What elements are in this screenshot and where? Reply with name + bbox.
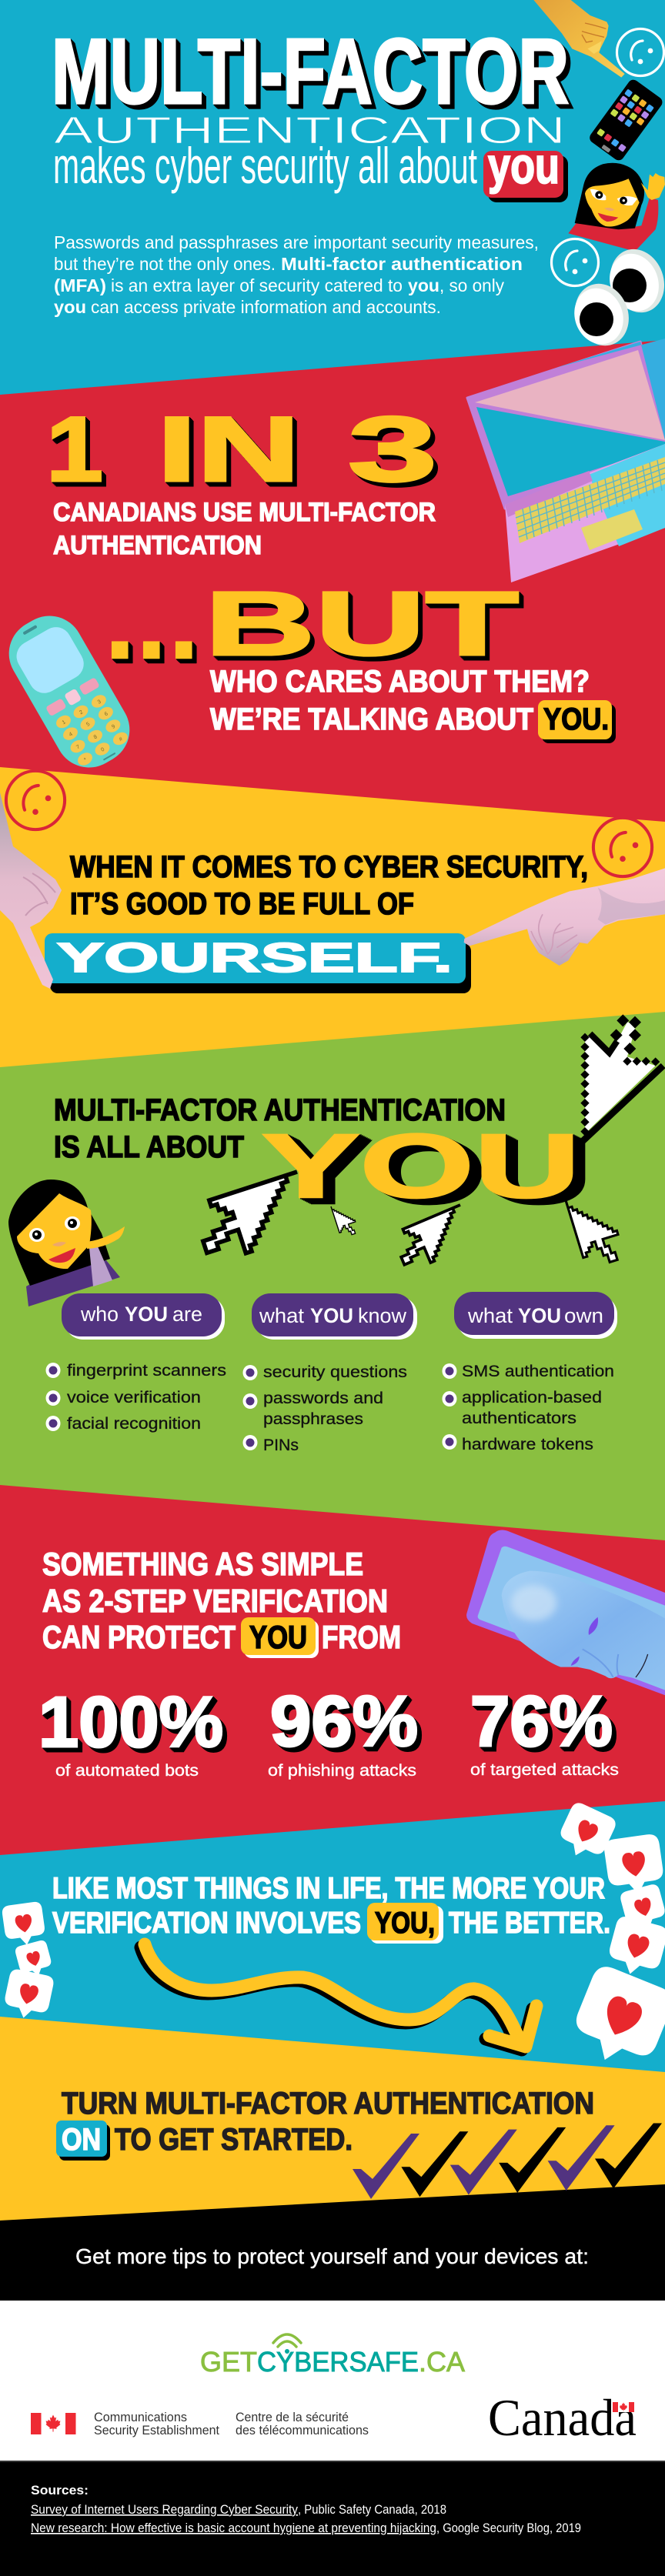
icon: waving woman: [568, 163, 665, 252]
icon: smile top right: [617, 29, 663, 75]
pill: who you are: YOU: [125, 1303, 168, 1326]
heart bubble right 1: [603, 1833, 665, 1898]
list: what you own: SMS authentication: [462, 1363, 614, 1380]
pill: who you are: [62, 1293, 225, 1340]
logo: canada wordmark: Canada: [488, 2388, 637, 2447]
list: what you know: passwords and: [263, 1390, 383, 1407]
text: who cares about them: WE’RE TALKING ABOUT: [210, 702, 533, 736]
text: who cares about them: YOU.: [543, 702, 609, 736]
icon: hand pointing down: [0, 792, 62, 989]
statistic: 76 percent: 76%: [470, 1681, 613, 1761]
pill: who you are: are: [172, 1303, 202, 1326]
icon: candy phone: 7: [75, 744, 81, 750]
pill: what you own: YOU: [518, 1304, 561, 1327]
icon: tablet: [587, 78, 664, 162]
statistic: 96 percent: of phishing attacks: [268, 1762, 416, 1780]
heading: turn mfa on: TURN MULTI-FACTOR AUTHENTICATION: [62, 2087, 594, 2121]
logo: getcybersafe: CYBERSAFE: [257, 2346, 419, 2377]
icon: red smile right: [593, 818, 652, 876]
list: what you know: passphrases: [263, 1410, 363, 1428]
pill: what you know: YOU: [310, 1304, 353, 1327]
heading: 2-step verification: YOU: [249, 1619, 307, 1655]
icon: candy phone: [0, 603, 142, 780]
logo: getcybersafe: .CA: [419, 2346, 465, 2377]
sources: [31, 2484, 581, 2535]
icon: laptop: [467, 339, 665, 582]
heart bubble right 3: [605, 1914, 665, 1980]
pill: what you know: what: [259, 1304, 304, 1327]
icon: candy phone: 5: [85, 722, 91, 728]
heading: mfa is all about: [54, 1093, 506, 1164]
text: more tips: Get more tips to protect yourself and your devices at:: [75, 2244, 589, 2268]
heading: 2-step verification: [42, 1546, 401, 1658]
intro paragraph: [54, 232, 539, 317]
tag: you: you: [488, 137, 560, 194]
pill: what you know: [252, 1293, 417, 1340]
text: when it comes to cyber security: [70, 850, 588, 921]
heading: ...but: .: [104, 554, 136, 683]
heading: ...but: .: [168, 554, 200, 683]
icon: cursor left: [192, 1172, 316, 1265]
logo: getcybersafe: GET: [200, 2346, 257, 2377]
list: who you are: fingerprint scanners: [67, 1362, 226, 1380]
icon: googly eyes: [566, 242, 665, 353]
icon: candy phone: 8: [93, 734, 99, 740]
list: what you own: [442, 1363, 614, 1453]
icon: candy phone: #: [119, 736, 124, 742]
text: communications security establishment: des télécommunications: [236, 2423, 369, 2438]
heart bubble left 2: [14, 1939, 54, 1980]
heading: turn mfa on: ON: [62, 2123, 101, 2157]
callout: yourself: [45, 933, 471, 993]
sources: , Public Safety Canada, 2018: [298, 2503, 446, 2517]
statistic caption: AUTHENTICATION: [53, 531, 262, 560]
intro paragraph: you: [408, 275, 439, 295]
list: who you are: facial recognition: [67, 1415, 201, 1433]
icon: candy phone: 1: [62, 719, 67, 726]
callout: yourself: YOURSELF.: [57, 935, 453, 981]
text: who cares about them: [210, 665, 616, 743]
heart bubble left 3: [2, 1968, 55, 2023]
heading: like most things in life: [52, 1872, 610, 1944]
statistic: 100 percent: 100%: [38, 1682, 223, 1762]
statistic: 1 in 3: 1: [46, 398, 103, 501]
logo: canadian flag: [31, 2413, 75, 2434]
text: when it comes to cyber security: IT’S GOOD TO BE FULL OF: [70, 887, 414, 921]
text: communications security establishment: Security Establishment: [94, 2423, 219, 2438]
statistic: 1 in 3: IN: [157, 398, 300, 501]
list: what you know: [243, 1363, 407, 1454]
intro paragraph: Passwords and passphrases are important security measures,: [54, 232, 539, 252]
list: who you are: voice verification: [67, 1389, 201, 1406]
intro paragraph: (MFA): [54, 275, 106, 295]
icon: cursor right: [566, 1189, 625, 1270]
statistic: 1 in 3: [46, 398, 437, 501]
icon: candy phone: 9: [111, 724, 116, 730]
pill: who you are: who: [80, 1303, 119, 1326]
icon: candy phone: 4: [69, 732, 74, 738]
heading: 2-step verification: FROM: [322, 1619, 401, 1655]
statistic: 96 percent: 96%: [270, 1681, 418, 1761]
list: what you own: hardware tokens: [462, 1436, 593, 1453]
pill: what you own: what: [467, 1304, 513, 1327]
heart bubble right large: [566, 1962, 665, 2076]
icon: candy phone: 6: [104, 711, 109, 717]
icon: hand pointing left: [464, 868, 665, 966]
sources: New research: How effective is basic account hygiene at preventing hijacking: [31, 2521, 436, 2535]
icon: candy phone: 0: [100, 747, 105, 753]
sources: Survey of Internet Users Regarding Cyber Security: [31, 2503, 299, 2517]
heading: authentication: AUTHENTICATION: [54, 110, 566, 152]
text: communications security establishment: [94, 2410, 369, 2438]
heading: like most things in life: VERIFICATION INVOLVES: [52, 1907, 361, 1940]
icons: check marks: [353, 2124, 662, 2199]
icon: smile lower: [551, 239, 599, 286]
sources: , Google Security Blog, 2019: [436, 2521, 581, 2535]
sources: Sources:: [31, 2484, 89, 2498]
arrow: curvy yellow: [141, 1944, 536, 2050]
intro paragraph: you: [54, 297, 86, 317]
heart bubble right 2: [619, 1883, 665, 1934]
statistic: 76 percent: of targeted attacks: [470, 1761, 619, 1779]
heading: like most things in life: YOU,: [375, 1907, 435, 1940]
heading: 2-step verification: SOMETHING AS SIMPLE: [42, 1546, 363, 1582]
heading: turn mfa on: [56, 2087, 594, 2161]
icon: woman in purple: [8, 1180, 125, 1306]
text: communications security establishment: Communications: [94, 2410, 187, 2424]
heading: 2-step verification: AS 2-STEP VERIFICATION: [42, 1583, 388, 1619]
heading: turn mfa on: TO GET STARTED.: [115, 2123, 353, 2157]
list: what you own: application-based: [462, 1389, 602, 1406]
heading: mfa is all about: MULTI-FACTOR AUTHENTICATION: [54, 1093, 506, 1127]
statistic: 1 in 3: 3: [348, 398, 437, 501]
heading: mfa is all about: IS ALL ABOUT: [54, 1130, 244, 1164]
pill: what you own: own: [564, 1304, 603, 1327]
heart bubble right 0: [554, 1800, 618, 1865]
pill: what you know: know: [358, 1304, 407, 1327]
heading: big you: YOU: [262, 1116, 580, 1217]
statistic caption: [53, 498, 436, 560]
heading: ...but: [104, 554, 519, 683]
heart bubble left 1: [2, 1901, 47, 1947]
icon: red smile left: [6, 771, 65, 829]
text: communications security establishment: Centre de la sécurité: [236, 2410, 349, 2424]
icon: candy phone: 2: [79, 709, 84, 716]
intro paragraph: Multi-factor authentication: [281, 254, 523, 274]
list: who you are: [46, 1362, 226, 1433]
icon: medium cursor: [392, 1205, 476, 1273]
statistic: 100 percent: of automated bots: [55, 1762, 199, 1780]
pill: what you own: [454, 1292, 617, 1339]
intro paragraph: is an extra layer of security catered to: [111, 275, 403, 295]
icon: small cursor: [331, 1201, 359, 1238]
icon: big cursor top right: [580, 1014, 663, 1143]
list: what you know: PINs: [263, 1436, 299, 1454]
icon: gold pointing hand: [533, 0, 625, 78]
list: what you know: security questions: [263, 1363, 407, 1381]
list: what you own: authenticators: [462, 1410, 576, 1427]
logo: getcybersafe: [200, 2334, 465, 2377]
statistic caption: CANADIANS USE MULTI-FACTOR: [53, 498, 436, 527]
text: when it comes to cyber security: WHEN IT COMES TO CYBER SECURITY,: [70, 850, 588, 884]
intro paragraph: but they’re not the only ones.: [54, 254, 276, 274]
text: who cares about them: WHO CARES ABOUT THEM?: [210, 665, 590, 699]
intro paragraph: , so only: [439, 275, 504, 295]
heading: ...but: BUT: [205, 573, 519, 675]
icon: face in tablet: [466, 1530, 665, 1695]
heading: 2-step verification: CAN PROTECT: [42, 1619, 236, 1655]
icon: candy phone: 3: [97, 699, 102, 706]
heading: ...but: .: [135, 554, 168, 683]
intro paragraph: can access private information and accounts.: [91, 297, 441, 317]
heading: like most things in life: THE BETTER.: [449, 1907, 610, 1940]
icon: candy phone: *: [83, 757, 88, 762]
